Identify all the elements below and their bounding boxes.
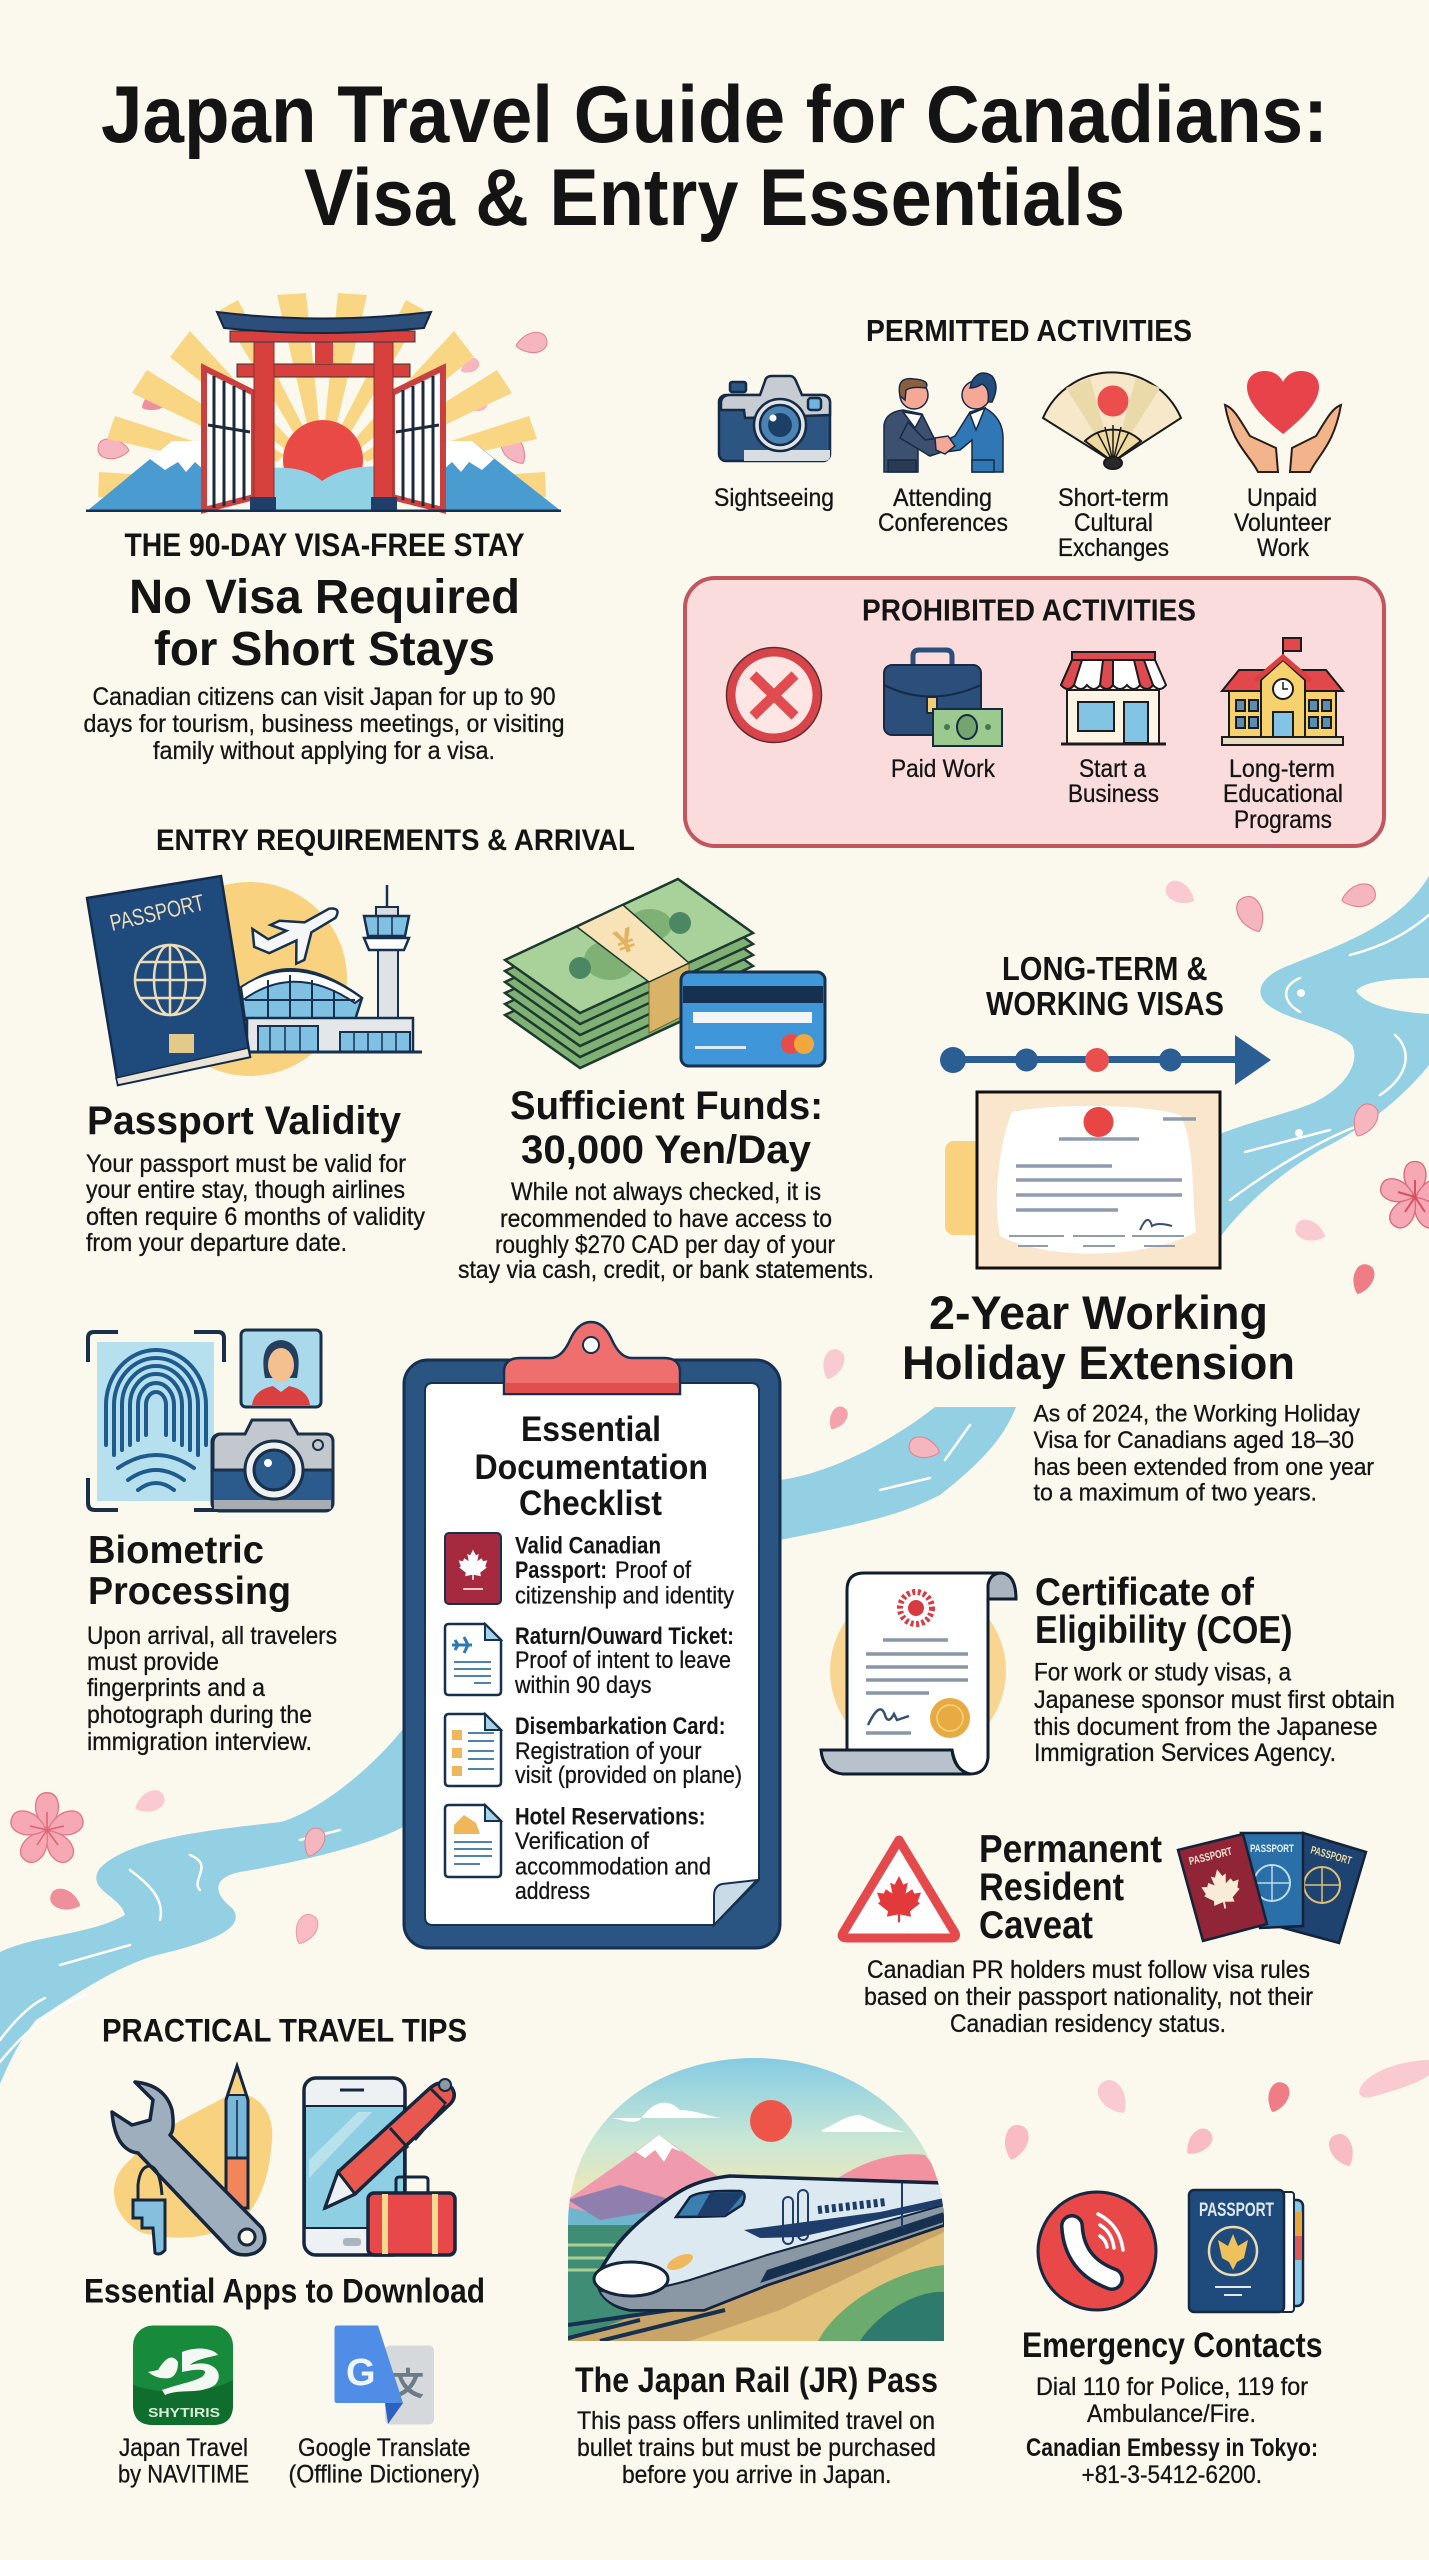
text: section label: THE 90-DAY VISA-FREE STAY <box>124 527 524 563</box>
checklist item: hotel reservations: accommodation and <box>515 1854 711 1880</box>
heading: permanent resident caveat <box>979 1828 1162 1947</box>
icon: folding fan, cultural exchanges <box>1043 372 1181 469</box>
icon: NAVITIME app <box>133 2326 233 2425</box>
checklist item: disembarkation card <box>445 1713 742 1789</box>
clipboard paper <box>425 1383 759 1925</box>
text: sufficient funds details: While not always checked, it is <box>511 1178 821 1206</box>
text: PR holder details: Canadian residency status. <box>950 2010 1226 2038</box>
panel: certificate of eligibility <box>821 1571 1395 1774</box>
text: short-term cultural exchanges: Cultural <box>1074 509 1153 537</box>
text: attending conferences: Conferences <box>878 509 1008 537</box>
text: JR pass details: before you arrive in Japan. <box>622 2461 892 2489</box>
icon: prohibited X <box>726 648 822 742</box>
text: passport validity details <box>86 1150 425 1257</box>
heading: practical travel tips: PRACTICAL TRAVEL TIPS <box>102 2012 467 2048</box>
icon: three passports: PASSPORT <box>1309 1844 1353 1868</box>
text: biometric details <box>87 1622 337 1756</box>
heading: no visa required: No Visa Required <box>129 571 520 624</box>
text: working holiday details <box>1034 1400 1374 1506</box>
checklist item: return ticket: within 90 days <box>514 1672 652 1699</box>
icon: Google Translate app <box>334 2326 434 2424</box>
icon: emergency phone <box>1038 2192 1156 2310</box>
icon: heart in hands, volunteer work <box>1225 371 1341 472</box>
heading: 2-year working holiday extension: Holiday Extension <box>902 1336 1295 1389</box>
checklist item: passport: citizenship and identity <box>515 1582 734 1610</box>
heading: biometric processing: Biometric <box>88 1529 264 1572</box>
text: attending conferences <box>878 484 1008 537</box>
text: COE details: this document from the Japanese <box>1034 1713 1378 1741</box>
panel: 90-day visa-free stay <box>84 293 564 765</box>
heading: biometric processing: Processing <box>88 1570 291 1613</box>
text: short-term cultural exchanges: Exchanges <box>1058 534 1169 562</box>
text: long-term educational programs: Long-term <box>1229 755 1335 783</box>
heading: permanent resident caveat: Resident <box>979 1866 1124 1909</box>
text: start a business: Business <box>1068 780 1159 808</box>
panel: permanent resident caveat <box>842 1828 1366 2038</box>
heading: biometric processing <box>88 1529 291 1613</box>
heading: long-term and working visas: LONG-TERM & <box>1002 950 1208 987</box>
text: unpaid volunteer work <box>1234 484 1331 562</box>
decorative petals and flowers <box>8 331 1429 2171</box>
checklist item: return ticket: Raturn/Ouward Ticket: <box>515 1623 734 1650</box>
text: biometric details: photograph during the <box>87 1701 312 1729</box>
checklist item: hotel reservations: address <box>515 1878 590 1905</box>
icon: working holiday certificate <box>945 1092 1220 1268</box>
heading: 2-year working holiday extension <box>902 1286 1295 1389</box>
text: emergency numbers <box>1026 2373 1318 2489</box>
text: biometric details: immigration interview. <box>87 1728 312 1756</box>
heading: JR pass: The Japan Rail (JR) Pass <box>575 2361 938 2400</box>
heading: prohibited activities: PROHIBITED ACTIVITIES <box>862 592 1196 628</box>
checklist item: disembarkation card: Registration of your <box>515 1738 702 1765</box>
heading: sufficient funds <box>510 1084 823 1172</box>
heading: essential documentation checklist: Essential <box>521 1410 661 1449</box>
checklist item: passport: Valid Canadian <box>515 1532 661 1560</box>
heading: no visa required <box>129 571 520 676</box>
text: unpaid volunteer work: Unpaid <box>1247 484 1317 512</box>
heading: permanent resident caveat: Permanent <box>979 1828 1162 1871</box>
icon: passport with emblem <box>1189 2190 1303 2312</box>
text: biometric details: must provide <box>87 1648 219 1676</box>
text: attending conferences: Attending <box>893 484 992 512</box>
checklist item: return ticket: Proof of intent to leave <box>515 1647 731 1674</box>
icon: torii gate with sunrise and mountains <box>86 293 561 512</box>
text: COE details: For work or study visas, a <box>1034 1658 1291 1686</box>
panel: practical travel tips <box>84 2012 485 2488</box>
heading: certificate of eligibility: Eligibility (COE) <box>1035 1609 1292 1652</box>
clipboard clip <box>504 1322 680 1394</box>
text: long-term educational programs: Programs <box>1234 806 1332 834</box>
icon: school building, long-term education <box>1222 638 1343 745</box>
icon: fingerprint with portrait and camera <box>88 1330 333 1511</box>
clipboard board <box>404 1360 780 1948</box>
title: Visa & Entry Essentials <box>304 153 1125 243</box>
heading: long-term and working visas: WORKING VISAS <box>986 985 1224 1022</box>
panel: documentation checklist clipboard <box>404 1322 780 1948</box>
text: passport validity details: often require 6 months of validity <box>86 1203 425 1231</box>
heading: essential documentation checklist: Documentation <box>474 1448 708 1487</box>
text: JR pass details <box>577 2407 936 2489</box>
text: short-term cultural exchanges <box>1058 484 1169 562</box>
icon: bullet train scene <box>560 2058 944 2341</box>
heading: certificate of eligibility <box>1035 1571 1292 1652</box>
icon: three passports <box>1178 1833 1366 1943</box>
icon: COE scroll document <box>821 1573 1016 1774</box>
icon: phone, pen and suitcase <box>304 2078 455 2255</box>
text: emergency numbers: Ambulance/Fire. <box>1087 2400 1256 2428</box>
icon: handshake, conferences <box>884 373 1003 472</box>
icon: three passports: PASSPORT <box>1188 1846 1234 1868</box>
text: working holiday details: As of 2024, the Working Holiday <box>1034 1400 1360 1428</box>
icon: passport with airport <box>87 876 422 1085</box>
icon: wrench and pencil <box>112 2066 272 2255</box>
panel: emergency contacts <box>1022 2190 1322 2489</box>
heading: certificate of eligibility: Certificate of <box>1035 1571 1255 1614</box>
text: unpaid volunteer work: Work <box>1257 534 1309 562</box>
icon: Google Translate app: G <box>346 2352 376 2394</box>
panel: entry requirements and arrival <box>86 824 874 1284</box>
icon: warning triangle with maple leaf <box>842 1840 956 1938</box>
text: sufficient funds details: recommended to have access to <box>500 1205 832 1233</box>
icon: banknote stack and credit card <box>505 879 825 1068</box>
text: sufficient funds details: stay via cash, credit, or bank statements. <box>458 1256 874 1284</box>
panel: permitted activities <box>714 313 1341 562</box>
heading: no visa required: for Short Stays <box>154 623 495 676</box>
checklist item: hotel reservations: Verification of <box>515 1828 649 1855</box>
heading: essential apps: Essential Apps to Download <box>84 2272 485 2310</box>
text: working holiday details: Visa for Canadians aged 18–30 <box>1034 1427 1354 1454</box>
checklist item: return ticket <box>445 1623 734 1699</box>
checklist item: disembarkation card: Disembarkation Card: <box>515 1713 726 1740</box>
heading: emergency contacts: Emergency Contacts <box>1022 2326 1322 2365</box>
checklist item: passport <box>445 1532 734 1610</box>
heading: permanent resident caveat: Caveat <box>979 1904 1093 1947</box>
panel background <box>685 578 1384 846</box>
heading: sufficient funds: 30,000 Yen/Day <box>521 1128 812 1172</box>
river: upper right <box>1210 876 1429 1250</box>
panel: prohibited activities <box>685 578 1384 846</box>
text: emergency numbers: +81-3-5412-6200. <box>1082 2461 1262 2489</box>
text: biometric details: fingerprints and a <box>87 1674 265 1702</box>
text: PR holder details: Canadian PR holders must follow visa rules <box>867 1956 1310 1984</box>
icon: passport with emblem: PASSPORT <box>1199 2200 1274 2221</box>
checklist item: disembarkation card: visit (provided on plane) <box>515 1762 742 1789</box>
text: short-term cultural exchanges: Short-term <box>1058 484 1169 512</box>
text: visa-free description: Canadian citizens can visit Japan for up to 90 <box>92 683 556 711</box>
text: working holiday details: to a maximum of two years. <box>1034 1480 1317 1506</box>
icon: camera, sightseeing <box>719 376 830 461</box>
heading: long-term and working visas <box>986 950 1224 1022</box>
text: visa-free description: days for tourism, business meetings, or visiting <box>84 710 564 738</box>
text: COE details: Japanese sponsor must first obtain <box>1034 1686 1395 1714</box>
text: JR pass details: bullet trains but must be purchased <box>577 2434 936 2462</box>
panel: Japan Rail Pass <box>560 2058 944 2489</box>
text: start a business: Start a <box>1079 755 1146 783</box>
text: PR holder details: based on their passport nationality, not their <box>864 1983 1313 2011</box>
heading: entry requirements: ENTRY REQUIREMENTS & ARRIVAL <box>156 824 635 857</box>
text: sightseeing: Sightseeing <box>714 484 834 512</box>
checklist item: passport: Proof of <box>615 1557 691 1584</box>
arrow: timeline <box>940 1035 1271 1085</box>
title: Japan Travel Guide for Canadians: <box>101 70 1328 160</box>
river: middle to lower left <box>0 1407 1016 2084</box>
text: unpaid volunteer work: Volunteer <box>1234 509 1331 537</box>
panel: long-term and working visas <box>902 950 1374 1506</box>
heading: permitted activities: PERMITTED ACTIVITIES <box>866 313 1192 348</box>
icon: NAVITIME app: SHYTIRIS <box>148 2405 220 2420</box>
heading: 2-year working holiday extension: 2-Year Working <box>929 1286 1268 1339</box>
text: visa-free description: family without applying for a visa. <box>153 737 495 765</box>
icon: storefront, start a business <box>1061 652 1166 744</box>
text: emergency numbers: Canadian Embessy in Tokyo: <box>1026 2434 1318 2462</box>
text: visa-free description <box>84 683 564 765</box>
text: working holiday details: has been extended from one year <box>1034 1454 1374 1481</box>
text: Google Translate label: (Offline Dictionery) <box>288 2460 480 2488</box>
text: emergency numbers: Dial 110 for Police, 119 for <box>1036 2373 1308 2401</box>
text: COE details: Immigration Services Agency. <box>1034 1739 1336 1767</box>
text: paid work: Paid Work <box>891 755 995 783</box>
icon: three passports: PASSPORT <box>1250 1843 1294 1855</box>
icon: Google Translate app: 文 <box>392 2366 424 2402</box>
text: COE details <box>1034 1658 1395 1767</box>
icon: passport with airport: PASSPORT <box>107 889 207 936</box>
heading: sufficient funds: Sufficient Funds: <box>510 1084 823 1128</box>
text: passport validity details: Your passport must be valid for <box>86 1150 406 1178</box>
text: biometric details: Upon arrival, all travelers <box>87 1622 337 1650</box>
text: Google Translate label <box>288 2434 480 2488</box>
text: NAVITIME label: Japan Travel <box>119 2434 248 2462</box>
checklist item: passport: Passport: <box>515 1557 607 1584</box>
text: NAVITIME label <box>118 2434 249 2488</box>
text: Google Translate label: Google Translate <box>298 2434 470 2462</box>
checklist item: hotel reservations: Hotel Reservations: <box>515 1804 706 1830</box>
text: JR pass details: This pass offers unlimited travel on <box>577 2407 935 2435</box>
icon: briefcase and cash, paid work <box>884 650 1002 746</box>
heading: essential documentation checklist <box>474 1410 708 1523</box>
title <box>101 70 1328 243</box>
text: passport validity details: your entire stay, though airlines <box>86 1176 405 1204</box>
text: NAVITIME label: by NAVITIME <box>118 2460 249 2488</box>
text: start a business <box>1068 755 1159 808</box>
text: passport validity details: from your departure date. <box>86 1229 347 1257</box>
text: sufficient funds details <box>458 1178 874 1284</box>
text: long-term educational programs <box>1223 755 1343 834</box>
heading: essential documentation checklist: Checklist <box>519 1484 662 1523</box>
text: sufficient funds details: roughly $270 CAD per day of your <box>495 1231 835 1259</box>
text: long-term educational programs: Educational <box>1223 780 1343 808</box>
panel: biometric processing <box>87 1330 337 1756</box>
text: PR holder details <box>864 1956 1313 2038</box>
clipboard page curl <box>714 1880 757 1925</box>
checklist item: hotel reservations <box>445 1804 711 1905</box>
heading: passport validity: Passport Validity <box>87 1099 402 1143</box>
icon: banknote stack and credit card: ¥ <box>610 920 641 963</box>
